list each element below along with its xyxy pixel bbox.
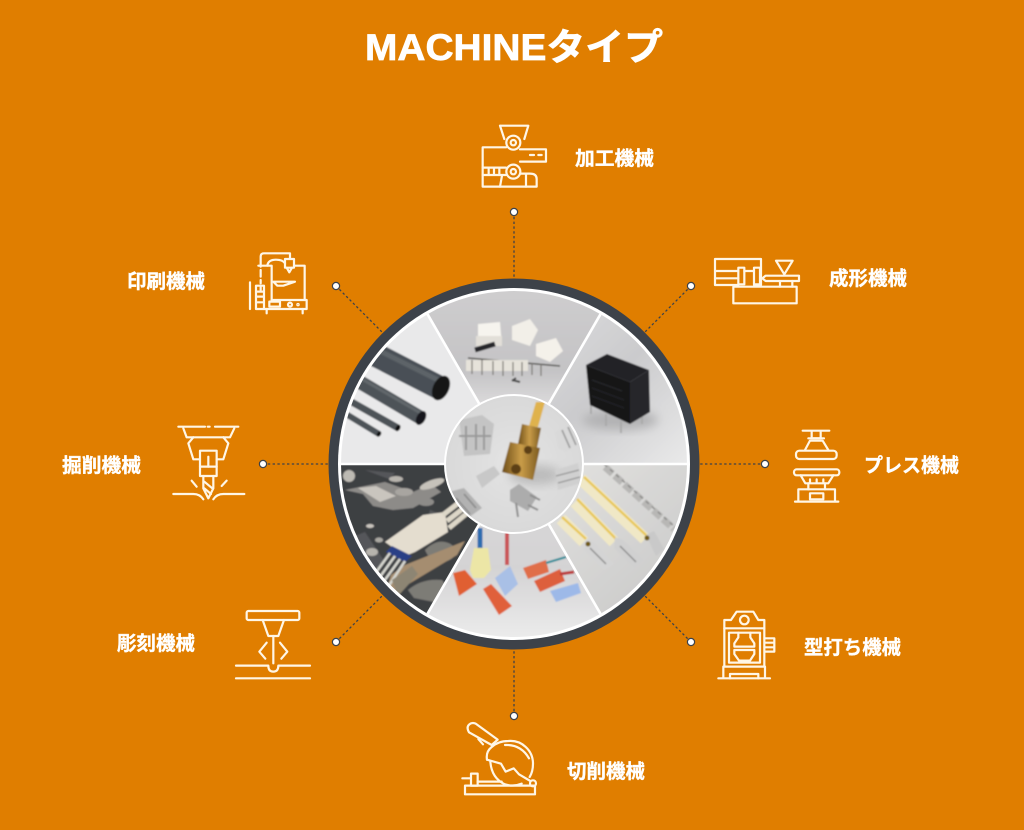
item: 成形機械 <box>715 259 907 303</box>
white inner ring <box>338 288 690 640</box>
label: プレス機械 <box>864 455 959 477</box>
label: 型打ち機械 <box>804 637 901 659</box>
central product wheel <box>328 278 700 650</box>
icon: press <box>794 431 839 502</box>
item: 印刷機械 <box>127 253 307 313</box>
outer dark ring <box>328 278 700 650</box>
item: 彫刻機械 <box>117 611 310 678</box>
item: 加工機械 <box>483 126 654 187</box>
photo: heat shrink tubes <box>341 315 478 463</box>
photo: insulated terminals <box>428 525 600 637</box>
centre circle photo: gold terminal <box>444 394 584 534</box>
photo: yellow wires with terminals <box>550 465 687 613</box>
icon: injection molding <box>715 259 799 303</box>
item: プレス機械 <box>794 431 959 502</box>
photo: white connectors <box>428 291 600 403</box>
label: 加工機械 <box>575 148 654 170</box>
icon: machining <box>483 126 546 187</box>
icon: laser engraver <box>236 611 310 678</box>
item: 切削機械 <box>462 723 645 794</box>
icon: stamping press <box>718 612 774 678</box>
spokes <box>341 314 687 614</box>
icon: cut-off saw <box>462 723 536 794</box>
label: 彫刻機械 <box>117 633 195 655</box>
title: MACHINEタイプ <box>365 27 663 68</box>
label: 印刷機械 <box>127 271 205 293</box>
label: 切削機械 <box>567 761 645 783</box>
label: 掘削機械 <box>62 455 141 477</box>
photo: black relay <box>550 315 687 463</box>
item: 掘削機械 <box>62 427 244 499</box>
label: 成形機械 <box>829 267 907 290</box>
icon: 3D printer <box>250 253 307 313</box>
icon: drilling head <box>173 427 244 499</box>
photo: waterproof connector on wet surface <box>341 465 478 614</box>
connector lines <box>259 208 769 720</box>
item: 型打ち機械 <box>718 612 901 678</box>
